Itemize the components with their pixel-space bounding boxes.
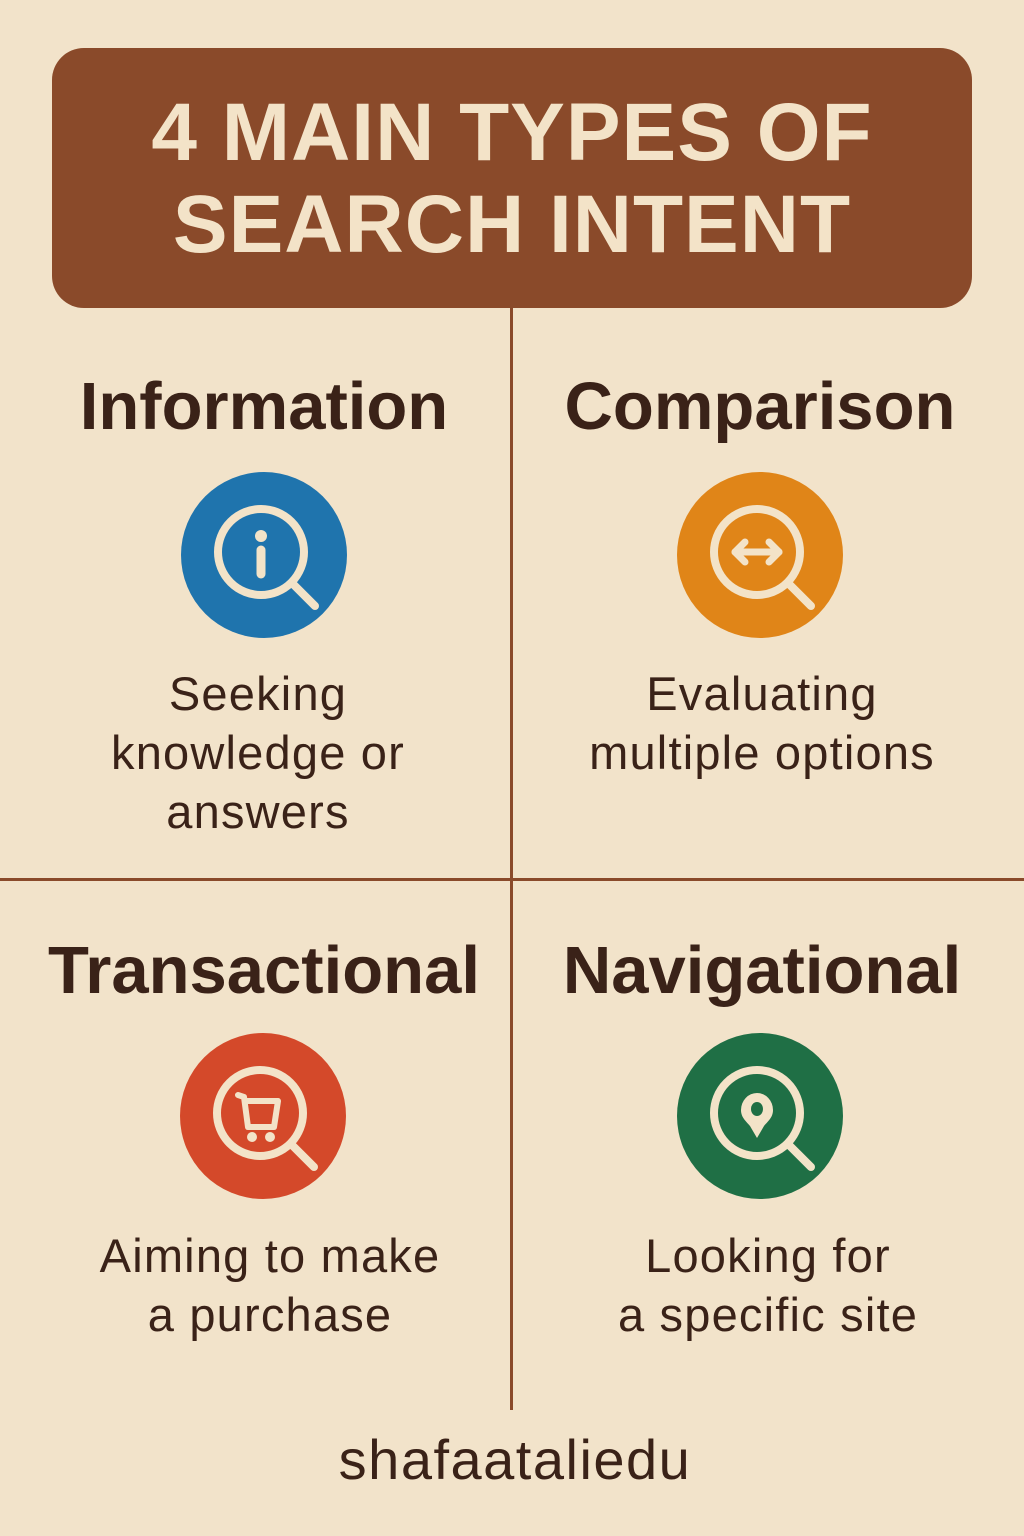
text: navigational description: a specific site: [618, 1288, 918, 1341]
panel: navigational: [563, 933, 961, 1341]
text: comparison description: multiple options: [589, 726, 935, 779]
heading: information: Information: [80, 369, 448, 444]
title: [52, 48, 972, 308]
text: transactional description: [100, 1229, 440, 1341]
text: information description: answers: [166, 785, 350, 838]
text: information description: Seeking: [169, 667, 347, 720]
heading: transactional: Transactional: [48, 933, 480, 1008]
text: navigational description: [618, 1229, 918, 1341]
heading: navigational: Navigational: [563, 933, 961, 1008]
title: 4 MAIN TYPES OF: [151, 87, 873, 178]
title: SEARCH INTENT: [173, 179, 851, 270]
icon: compare search: [677, 472, 843, 638]
text: comparison description: Evaluating: [646, 667, 878, 720]
text: transactional description: a purchase: [148, 1288, 392, 1341]
text: information description: knowledge or: [111, 726, 405, 779]
panel: transactional: [48, 933, 480, 1341]
icon: info search: [181, 472, 347, 638]
panel: comparison: [565, 369, 955, 779]
heading: comparison: Comparison: [565, 369, 955, 444]
text: information description: [111, 667, 405, 838]
footer: author: shafaataliedu: [339, 1428, 691, 1491]
icon: cart search: [180, 1033, 346, 1199]
text: navigational description: Looking for: [645, 1229, 891, 1282]
text: comparison description: [589, 667, 935, 779]
text: transactional description: Aiming to make: [100, 1229, 440, 1282]
panel: information: [80, 369, 448, 838]
icon: location search: [677, 1033, 843, 1199]
